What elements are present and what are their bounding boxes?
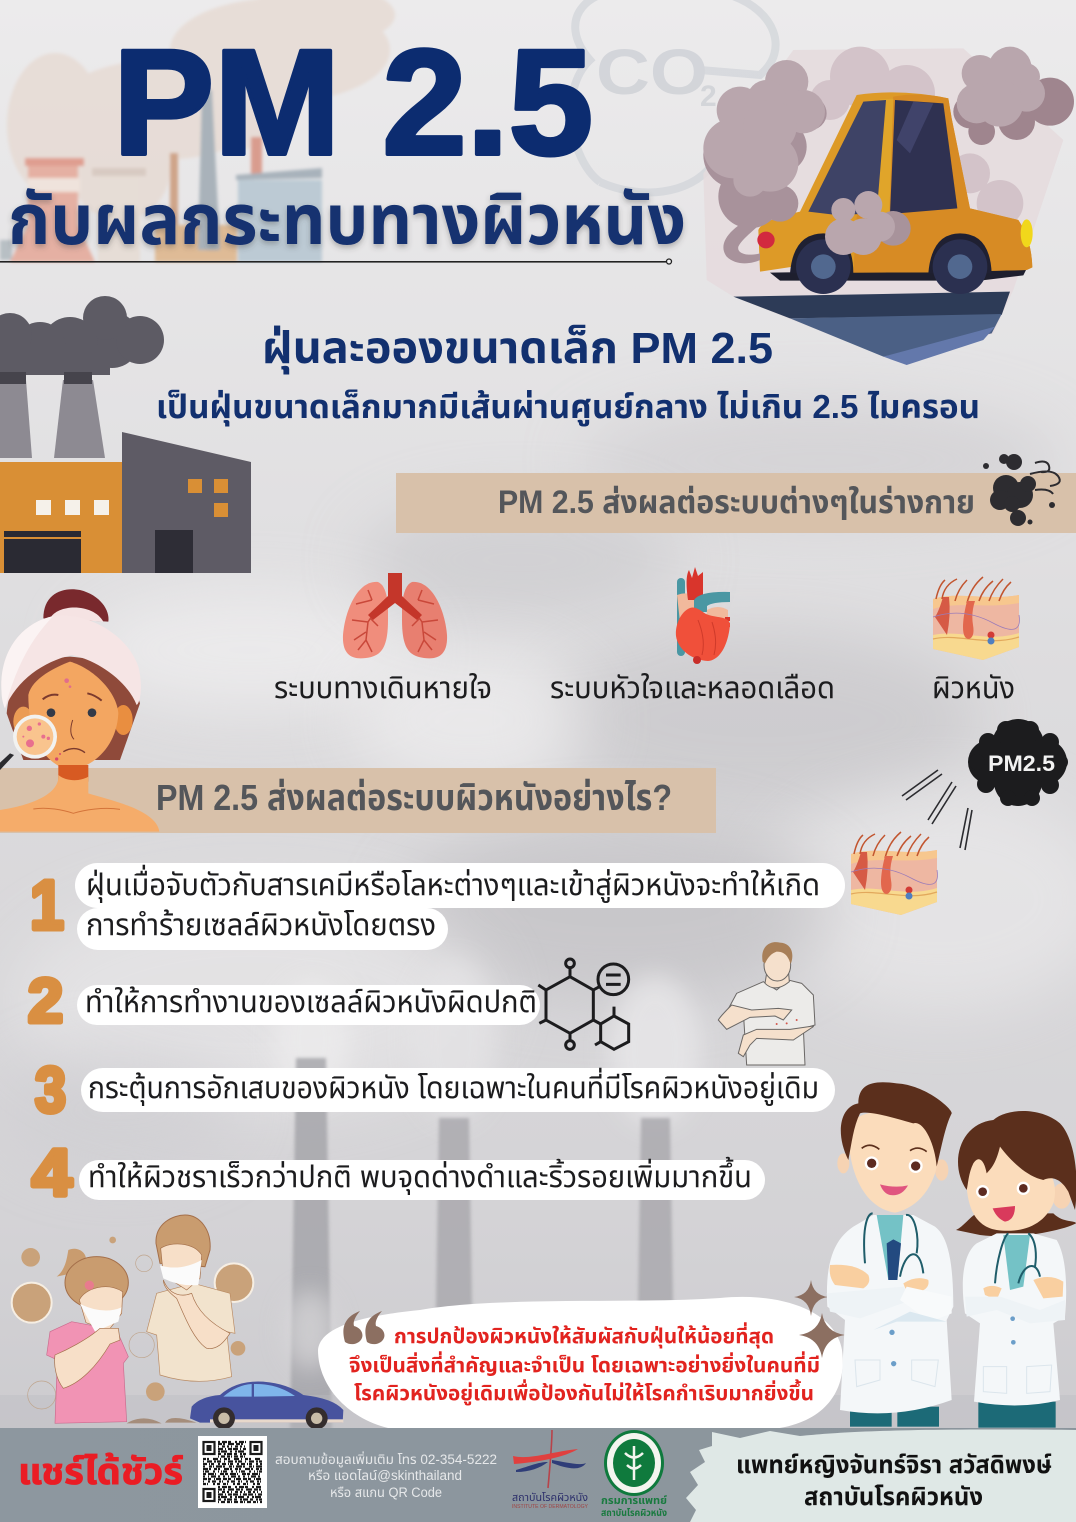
banner: how PM 2.5 affects skin — [0, 768, 716, 833]
icon: PM2.5 black cloud — [968, 719, 1068, 806]
credit: doctor name and institute — [736, 1451, 1052, 1511]
step 4: 4 — [32, 1135, 72, 1209]
icon: man scratching arm — [718, 942, 815, 1065]
step 3: กระตุ้นการอักเสบของผิวหนัง โดยเฉพาะในคนที่มีโรคผิวหนังอยู่เดิม — [88, 1067, 819, 1106]
footer band — [0, 1428, 1076, 1522]
step 2 — [28, 967, 540, 1036]
small blue car — [190, 1381, 343, 1429]
label: respiratory system: ระบบทางเดินหายใจ — [274, 672, 492, 705]
boy — [147, 1283, 235, 1381]
logo: Department of Medical Services: กรมการแพทย์ — [601, 1495, 667, 1507]
definition text: เป็นฝุ่นขนาดเล็กมากมีเส้นผ่านศูนย์กลาง ไม่เกิน 2.5 ไมครอน — [156, 388, 980, 427]
label: skin: ผิวหนัง — [932, 672, 1015, 705]
illustration: male doctor — [827, 1082, 953, 1427]
step 4 — [32, 1135, 765, 1209]
illustration: female doctor — [956, 1111, 1076, 1428]
faded factory behind the title — [0, 0, 395, 262]
quote mark — [343, 1311, 384, 1344]
illustration: car with exhaust smoke — [703, 47, 1074, 365]
exhaust smoke right — [953, 78, 1074, 145]
step 2: 2 — [28, 967, 63, 1036]
icon: dust cloud blowing — [983, 454, 1060, 526]
credit: doctor name and institute: สถาบันโรคผิวหนัง — [804, 1483, 983, 1511]
footer brush panel — [686, 1429, 1076, 1522]
step 1: การทำร้ายเซลล์ผิวหนังโดยตรง — [86, 909, 436, 942]
logo: Department of Medical Services — [601, 1430, 667, 1519]
icon: motion lines toward skin — [902, 770, 972, 850]
contact text: หรือ แอดไลน์@skinthailand — [308, 1468, 462, 1483]
step 3: 3 — [35, 1054, 66, 1126]
quote bubble: จึงเป็นสิ่งที่สำคัญและจำเป็น โดยเฉพาะอย่างยิ่งในคนที่มี — [349, 1351, 820, 1377]
step 4: ทำให้ผิวชราเร็วกว่าปกติ พบจุดด่างดำและริ้วรอยเพิ่มมากขึ้น — [88, 1156, 752, 1195]
heading: fine particulate matter: ฝุ่นละอองขนาดเล็ก PM 2.5 — [262, 324, 773, 375]
faded CO2 bubble — [571, 0, 776, 192]
step 1: 1 — [30, 866, 64, 944]
illustration: children wearing masks — [12, 1215, 343, 1429]
QR code — [198, 1436, 267, 1508]
illustration: woman with skin problem — [0, 589, 159, 832]
contact text: สอบถามข้อมูลเพิ่มเติม โทร 02-354-5222 — [275, 1451, 497, 1468]
icon: lungs — [343, 573, 447, 658]
logo: Institute of Dermatology: INSTITUTE OF DERMATOLOGY — [512, 1504, 589, 1510]
icon: chemical molecule — [538, 959, 629, 1049]
background: power-plant chimneys — [0, 960, 1076, 1431]
banner: effects on body systems — [396, 473, 1076, 533]
icon: PM2.5 black cloud: PM2.5 — [988, 751, 1055, 776]
label: cardiovascular system: ระบบหัวใจและหลอดเลือด — [550, 672, 835, 705]
quote bubble: การปกป้องผิวหนังให้สัมผัสกับฝุ่นให้น้อยที่สุด — [394, 1322, 774, 1348]
faded CO2 bubble: CO — [596, 36, 708, 108]
icon: skin cross-section small — [851, 832, 937, 915]
banner: effects on body systems: PM 2.5 ส่งผลต่อระบบต่างๆในร่างกาย — [498, 484, 975, 520]
share logo text: แชร์ได้ชัวร์ — [18, 1451, 183, 1492]
step 2: ทำให้การทำงานของเซลล์ผิวหนังผิดปกติ — [85, 986, 537, 1019]
faded CO2 bubble: 2 — [700, 80, 717, 113]
title underline — [0, 259, 672, 264]
icon: heart — [676, 567, 730, 664]
icon: skin cross-section — [933, 577, 1019, 660]
quote bubble: โรคผิวหนังอยู่เดิมเพื่อป้องกันไม่ให้โรคกำเริบมากยิ่งขึ้น — [354, 1379, 814, 1405]
smoke over door — [876, 211, 911, 246]
exhaust smoke left — [703, 97, 827, 263]
step 3 — [35, 1054, 835, 1126]
illustration: factory with dark smoke — [0, 296, 251, 573]
contact text: หรือ สแกน QR Code — [330, 1485, 442, 1500]
logo: Institute of Dermatology — [512, 1430, 589, 1510]
credit: doctor name and institute: แพทย์หญิงจันทร์จิรา สวัสดิพงษ์ — [736, 1451, 1052, 1479]
logo: Department of Medical Services: สถาบันโรคผิวหนัง — [601, 1507, 667, 1519]
step 1: ฝุ่นเมื่อจับตัวกับสารเคมีหรือโลหะต่างๆและเข้าสู่ผิวหนังจะทำให้เกิด — [86, 864, 820, 903]
logo: Institute of Dermatology: สถาบันโรคผิวหนัง — [512, 1492, 588, 1504]
banner: how PM 2.5 affects skin: PM 2.5 ส่งผลต่อระบบผิวหนังอย่างไร? — [156, 777, 672, 818]
icon: sparkle stars — [794, 1280, 845, 1358]
contact text — [275, 1451, 497, 1500]
subtitle: กับผลกระทบทางผิวหนัง — [8, 181, 686, 259]
step 1 — [30, 863, 845, 950]
title: PM 2.5: PM 2.5 — [113, 18, 593, 186]
quote bubble — [318, 1297, 843, 1430]
girl — [47, 1322, 128, 1423]
